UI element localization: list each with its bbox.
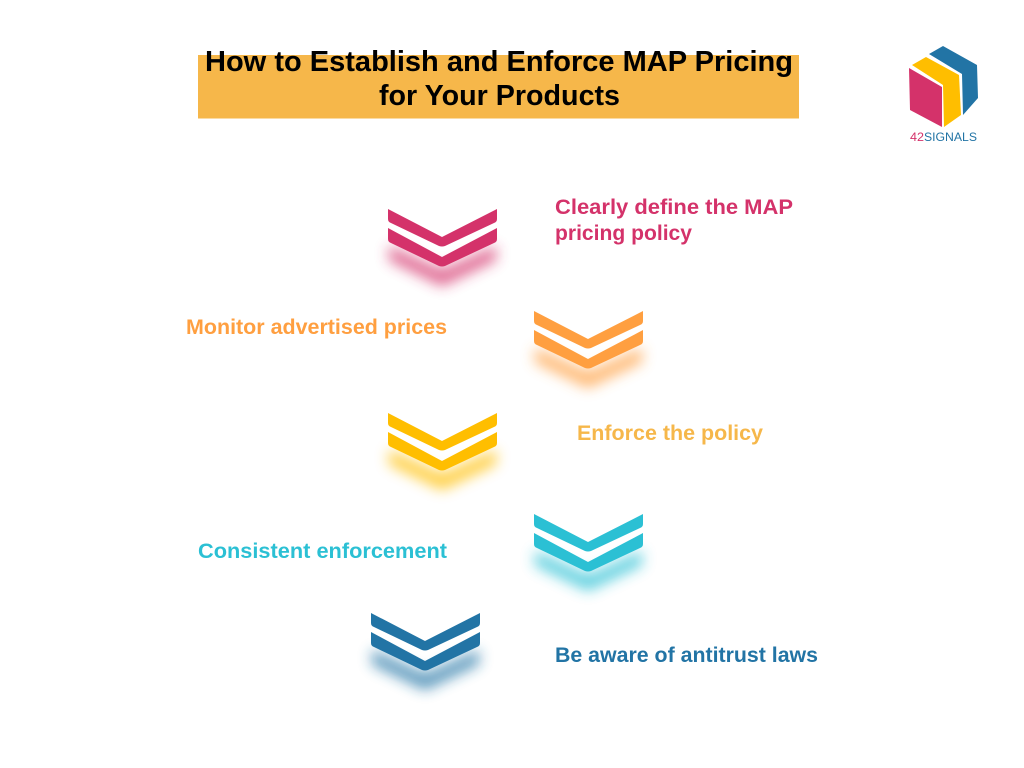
step 1 label [555,196,793,245]
title text: How to Establish and Enforce MAP Pricing [205,46,793,78]
step 1 label: Clearly define the MAP [555,196,793,219]
step 1 label: pricing policy [555,222,692,245]
step 2 label: Monitor advertised prices [186,316,447,339]
logo: 42signals: SIGNALS [924,132,977,144]
step 1 chevron icon [388,209,497,286]
title text: for Your Products [379,80,620,112]
step 5 label: Be aware of antitrust laws [555,644,818,667]
title banner [198,46,799,118]
title text [205,46,793,112]
step 3 label: Enforce the policy [577,422,763,445]
step 2 chevron icon [534,311,643,388]
step 3 chevron icon [388,413,497,490]
step 5 chevron icon [371,613,480,690]
logo: 42signals [909,46,978,144]
step 4 chevron icon [534,514,643,591]
step 4 label: Consistent enforcement [198,540,447,563]
logo: 42signals: 42 [910,132,924,144]
